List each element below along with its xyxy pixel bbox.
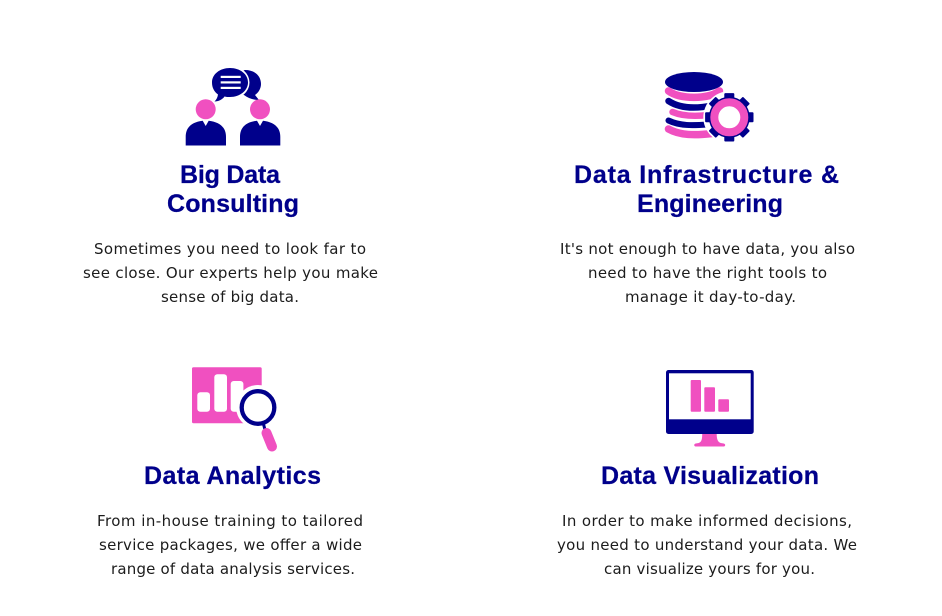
description: It's not enough to have data, you also [560,240,855,258]
description: see close. Our experts help you make [83,264,378,282]
description [97,512,363,578]
description: range of data analysis services. [111,560,355,578]
description [83,240,378,306]
description: Sometimes you need to look far to [94,240,366,258]
description: From in-house training to tailored [97,512,363,530]
description: service packages, we offer a wide [99,536,362,554]
heading: Data Analytics [144,462,321,490]
description: sense of big data. [161,288,299,306]
description [560,240,855,306]
description: you need to understand your data. We [557,536,857,554]
description: manage it day-to-day. [625,288,796,306]
panel: Data Infrastructure & Engineering [560,72,855,306]
heading [574,161,839,218]
icon: monitor with bar chart [666,370,754,446]
panel: Big Data Consulting [83,66,378,306]
icon: chart with magnifier [192,367,280,446]
description [557,512,857,578]
heading: Data Infrastructure & [574,161,839,189]
description: need to have the right tools to [588,264,827,282]
heading: Data Visualization [601,462,819,490]
icon: database with gear [665,72,755,143]
heading: Engineering [637,190,783,218]
heading: Big Data [180,161,281,189]
description: In order to make informed decisions, [562,512,852,530]
icon: people talking [186,66,280,146]
description: can visualize yours for you. [604,560,815,578]
heading: Consulting [167,190,299,218]
panel: Data Visualization [557,370,857,578]
panel: Data Analytics [97,367,363,578]
heading [167,161,299,218]
